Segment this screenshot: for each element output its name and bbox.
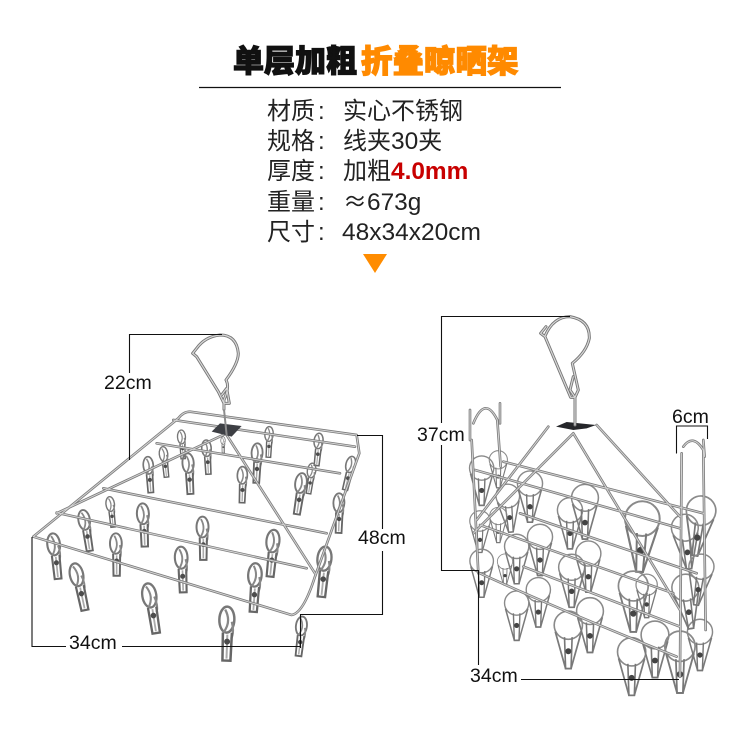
- specification list: 实心不锈钢: [343, 98, 463, 125]
- right rack wire frame: [470, 403, 706, 677]
- specification list: 48x34x20cm: [342, 219, 481, 246]
- right rack clothes pegs: [470, 451, 718, 695]
- specification list: 厚度: [267, 158, 315, 185]
- left rack dimensions: 22cm: [104, 372, 152, 394]
- specification list: 重量: [267, 189, 315, 216]
- right rack dimensions: 34cm: [470, 665, 518, 687]
- specification list: 线夹30夹: [343, 128, 442, 155]
- specification list: 尺寸: [267, 219, 315, 246]
- left rack centre plate: [212, 423, 242, 437]
- left rack: open drying rack photo: [33, 335, 359, 661]
- title: [233, 43, 519, 79]
- title: 单层加粗: [233, 44, 357, 79]
- specification list: :: [318, 189, 325, 216]
- specification list: :: [318, 128, 325, 155]
- arrow: down triangle: [363, 254, 387, 273]
- right rack dimensions: [417, 316, 709, 687]
- specification list: :: [318, 219, 325, 246]
- left rack hook: [193, 335, 238, 435]
- title: 折叠晾晒架: [361, 43, 519, 79]
- right rack centre plate: [556, 422, 596, 430]
- specification list: [267, 98, 481, 246]
- specification list: :: [318, 158, 325, 185]
- specification list: 规格: [267, 128, 315, 155]
- specification list: 673g: [367, 189, 421, 216]
- specification list: ≈: [343, 182, 367, 217]
- left rack dimensions: 48cm: [358, 527, 406, 549]
- left rack dimensions: 34cm: [69, 632, 117, 654]
- specification list: 材质: [267, 98, 315, 125]
- right rack: folded drying rack photo: [470, 317, 718, 695]
- title underline: [199, 86, 561, 88]
- left rack dimensions: [32, 334, 406, 654]
- right rack hook: [541, 317, 589, 425]
- specification list: :: [318, 98, 325, 125]
- right rack dimensions: 37cm: [417, 424, 465, 446]
- specification list: 加粗4.0mm: [343, 158, 468, 185]
- left rack clothes pegs: [46, 426, 357, 661]
- left rack wire frame: [33, 412, 359, 615]
- right rack dimensions: 6cm: [672, 406, 709, 428]
